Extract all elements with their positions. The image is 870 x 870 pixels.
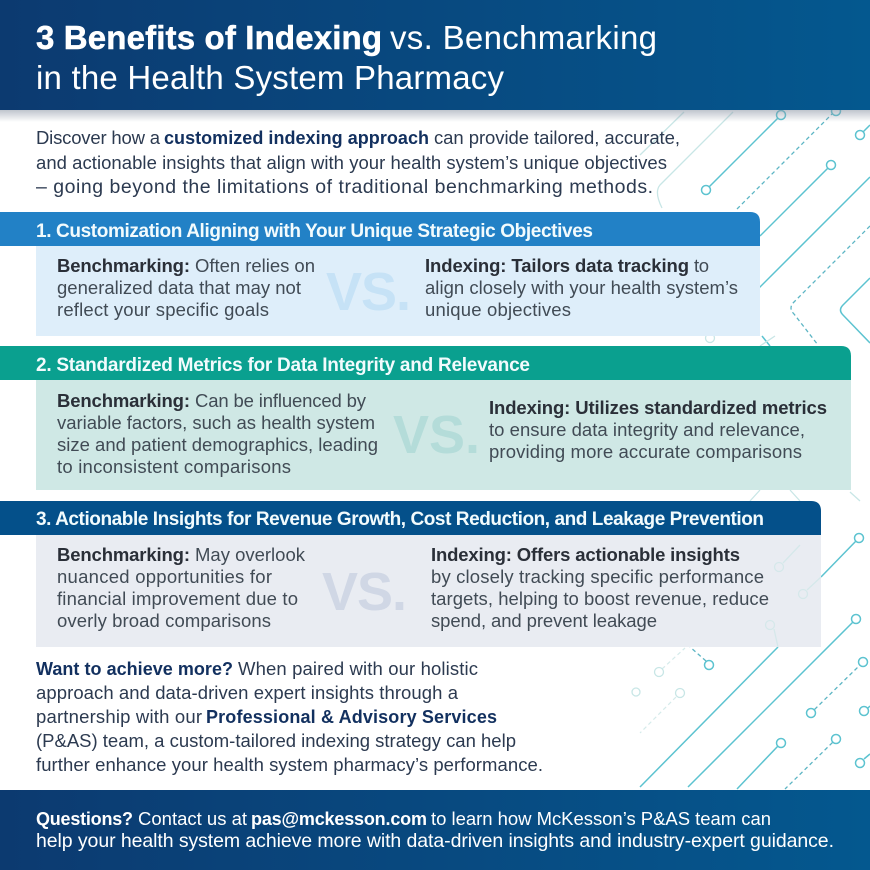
panel 3 benchmarking text: May overlook (195, 544, 306, 565)
closing text block: approach and data-driven expert insights through a (36, 682, 459, 703)
footer contact text: pas@mckesson.com (251, 809, 427, 829)
panel 2 vs mark: VS. (393, 405, 480, 465)
closing text block: Want to achieve more? (36, 659, 233, 679)
footer banner (0, 790, 870, 870)
footer contact text (36, 808, 834, 852)
panel 1 indexing text: align closely with your health system’s (425, 277, 738, 298)
panel 3 heading (0, 501, 821, 535)
panel 1 indexing text: unique objectives (425, 299, 571, 320)
panel 2 benchmarking text: to inconsistent comparisons (57, 456, 291, 477)
panel 1 indexing text (425, 255, 738, 320)
panel: 1 customization (0, 212, 760, 336)
intro text: customized indexing approach (164, 128, 429, 148)
panel 1 heading (0, 212, 760, 246)
footer contact text: Questions? (36, 809, 133, 829)
title: 3 Benefits of Indexing (36, 19, 382, 56)
panel 2 indexing text: Indexing: Utilizes standardized metrics (489, 397, 827, 418)
intro text (36, 127, 680, 198)
panel 1 body (36, 246, 760, 336)
title: vs. Benchmarking (390, 19, 657, 56)
panel 3 benchmarking text: overly broad comparisons (57, 610, 271, 631)
closing text block: partnership with our (36, 706, 202, 727)
panel: 3 actionable insights (0, 501, 821, 647)
panel 2 benchmarking text: size and patient demographics, leading (57, 434, 378, 455)
panel 1 indexing text: to (694, 255, 709, 276)
closing text block: Professional & Advisory Services (206, 707, 497, 727)
panel 2 heading: 2. Standardized Metrics for Data Integrity and Relevance (36, 355, 530, 376)
panel 2 benchmarking text (57, 390, 378, 477)
panel 1 benchmarking text: generalized data that may not (57, 277, 301, 298)
closing text block: (P&AS) team, a custom-tailored indexing strategy can help (36, 730, 516, 751)
panel 1 benchmarking text: Benchmarking: (57, 255, 190, 276)
panel 1 heading: 1. Customization Aligning with Your Unique Strategic Objectives (36, 221, 593, 242)
panel 3 indexing text: Indexing: Offers actionable insights (431, 544, 740, 565)
panel 2 indexing text: providing more accurate comparisons (489, 441, 802, 462)
panel 3 indexing text: spend, and prevent leakage (431, 610, 657, 631)
intro text: – going beyond the limitations of traditional benchmarking methods. (36, 176, 653, 198)
closing text block: further enhance your health system pharmacy’s performance. (36, 754, 543, 775)
panel 2 heading (0, 346, 851, 380)
panel 1 indexing text: Indexing: Tailors data tracking (425, 255, 689, 276)
panel 3 benchmarking text: financial improvement due to (57, 588, 298, 609)
faint pattern through panel 3 (766, 545, 821, 647)
panel 1 benchmarking text: Often relies on (195, 255, 315, 276)
panel 1 benchmarking text (57, 255, 315, 320)
panel 2 benchmarking text: Benchmarking: (57, 390, 190, 411)
footer contact text: to learn how McKesson’s P&AS team can (431, 808, 771, 829)
panel 3 indexing text: targets, helping to boost revenue, reduce (431, 588, 769, 609)
panel 3 indexing text (431, 544, 769, 631)
header banner (0, 0, 870, 122)
panel 3 body (36, 535, 821, 647)
panel 2 benchmarking text: variable factors, such as health system (57, 412, 375, 433)
panel 3 heading: 3. Actionable Insights for Revenue Growth, Cost Reduction, and Leakage Prevention (36, 509, 764, 530)
panel 3 vs mark: VS. (322, 562, 407, 622)
title (36, 19, 657, 96)
intro text: and actionable insights that align with your health system’s unique objectives (36, 152, 667, 173)
panel 3 benchmarking text: nuanced opportunities for (57, 566, 272, 587)
panel 2 benchmarking text: Can be influenced by (195, 390, 367, 411)
panel 1 benchmarking text: reflect your specific goals (57, 299, 269, 320)
panel 2 indexing text: to ensure data integrity and relevance, (489, 419, 805, 440)
panel 3 benchmarking text (57, 544, 306, 631)
footer contact text: Contact us at (138, 808, 247, 829)
background circuit pattern (632, 106, 870, 789)
intro text: Discover how a (36, 127, 161, 148)
panel 2 body (36, 380, 851, 490)
panel 2 indexing text (489, 397, 827, 462)
intro text: can provide tailored, accurate, (434, 127, 680, 148)
panel 3 indexing text: by closely tracking specific performance (431, 566, 764, 587)
panel 1 vs mark: VS. (326, 262, 411, 322)
panel: 2 standardized metrics (0, 346, 851, 490)
title: in the Health System Pharmacy (36, 59, 504, 96)
footer contact text: help your health system achieve more with data-driven insights and industry-expert guidance. (36, 830, 834, 852)
panel 3 benchmarking text: Benchmarking: (57, 544, 190, 565)
closing text block: When paired with our holistic (238, 658, 478, 679)
closing text block (36, 658, 543, 775)
